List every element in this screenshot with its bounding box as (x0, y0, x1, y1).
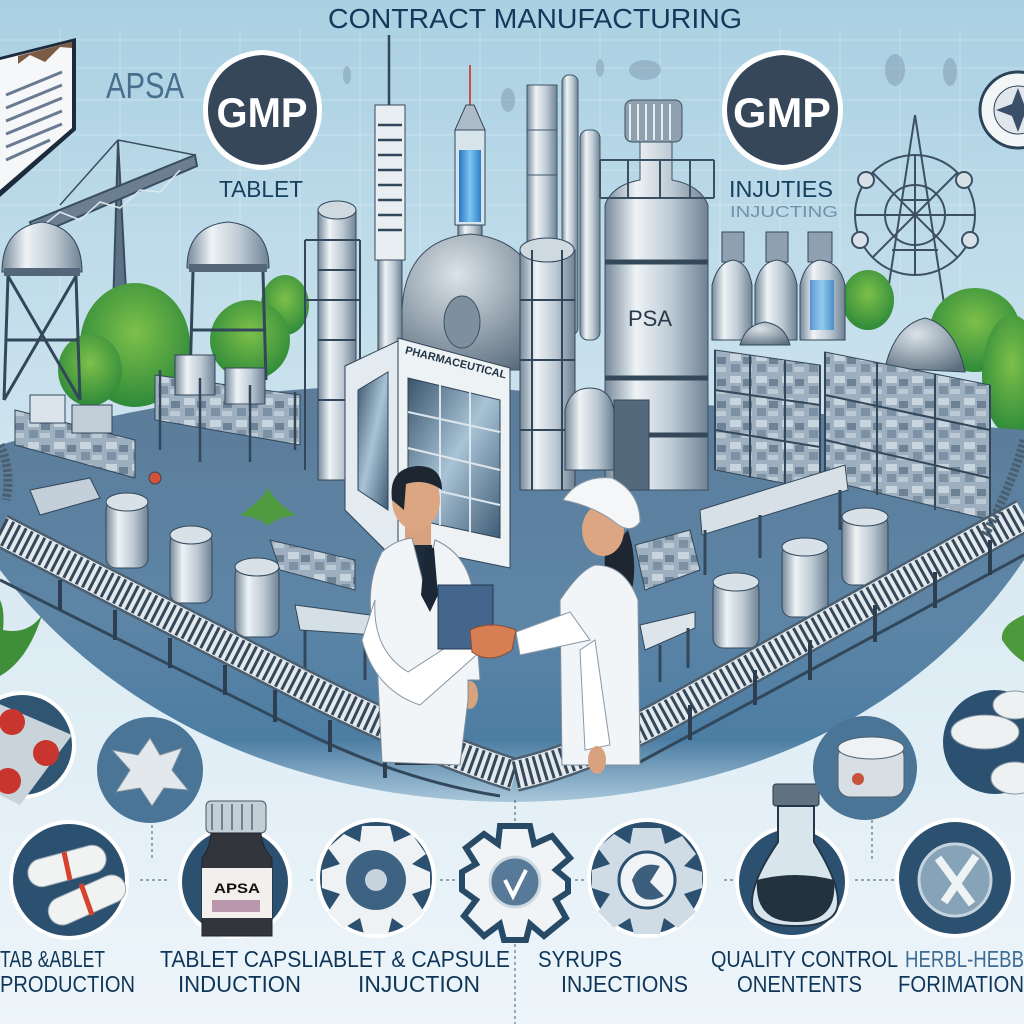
label: induction right: INJUCTION (358, 971, 480, 997)
badge: GMP right (722, 50, 843, 170)
dome reactor (402, 234, 540, 370)
handshake (470, 625, 516, 658)
right small tanks (712, 232, 845, 340)
person: woman in lab coat (516, 478, 640, 774)
icon: flask (735, 784, 849, 939)
floor canister 5 (782, 538, 828, 617)
metal columns (527, 75, 600, 340)
water tower middle (187, 222, 269, 380)
label: injections: INJECTIONS (561, 971, 688, 997)
conveyor belt left (0, 530, 515, 796)
icon: gear one (316, 818, 436, 938)
main building: PHARMACEUTICAL (404, 345, 508, 382)
label: injucting: INJUCTING (730, 204, 838, 221)
left leaf decoration (0, 600, 42, 676)
icon: gear three (587, 818, 707, 938)
document panel (0, 38, 76, 197)
label: tablet: TABLET (219, 176, 303, 202)
plant center (240, 488, 296, 526)
right process tower (520, 238, 575, 490)
main silo (600, 100, 714, 490)
dashed connector lines (140, 800, 895, 1024)
floor canister 3 (235, 558, 279, 637)
label: tablet capsule: TABLET CAPSLIABLET & CAPSULE (160, 946, 510, 972)
bottom labels (0, 946, 1024, 997)
ferris wheel tower (852, 115, 978, 310)
right leaf decoration (1002, 615, 1024, 662)
icon: APSA bottle: APSA (214, 880, 260, 896)
greenery (58, 270, 1024, 435)
main silo: PSA (628, 306, 672, 331)
person: man in lab coat (362, 466, 493, 765)
label: tab tablet: TAB &ABLET (0, 946, 105, 972)
crane (30, 140, 197, 310)
badge: GMP right: GMP (733, 89, 831, 136)
label: induction left: INDUCTION (178, 971, 301, 997)
badge: GMP left: GMP (216, 89, 308, 136)
floor canister 4 (713, 573, 759, 648)
floor canister 2 (170, 526, 212, 603)
background grid (0, 30, 1024, 300)
floor canister 6 (842, 508, 888, 585)
icon: molecule star (97, 717, 203, 823)
icon: APSA bottle (178, 801, 292, 939)
label: quality control: QUALITY CONTROL (711, 946, 898, 972)
seal emblem (980, 72, 1024, 148)
label: injuties: INJUTIES (729, 176, 833, 202)
icon: gear check (462, 826, 570, 940)
tall tower left (305, 201, 360, 480)
floor canister 1 (106, 493, 148, 568)
equipment left (30, 478, 700, 682)
icon: herbal disc (895, 818, 1015, 938)
icon: jar (813, 716, 917, 820)
conveyor belt right (515, 515, 1024, 775)
right rack two (825, 318, 990, 520)
APSA label: APSA (106, 65, 184, 106)
water tower left (2, 222, 82, 400)
small side tank (565, 388, 649, 490)
label: ointments: ONENTENTS (737, 971, 862, 997)
left machinery (15, 355, 300, 484)
conveyor rim edges (0, 440, 1024, 535)
label: syrups: SYRUPS (538, 946, 622, 972)
icon: pills (9, 820, 130, 940)
icon: blister pack (0, 691, 76, 805)
faint sketch icons (343, 54, 957, 112)
icon: white discs (943, 690, 1024, 794)
work table right (700, 465, 848, 575)
title: CONTRACT MANUFACTURING (328, 3, 742, 34)
right rack one (715, 322, 820, 490)
label: production: PRODUCTION (0, 971, 135, 997)
main building (345, 338, 510, 568)
syringe tower (375, 35, 405, 350)
factory floor (0, 386, 1024, 802)
badge: GMP left (203, 50, 322, 170)
blue syringe column (455, 65, 485, 255)
